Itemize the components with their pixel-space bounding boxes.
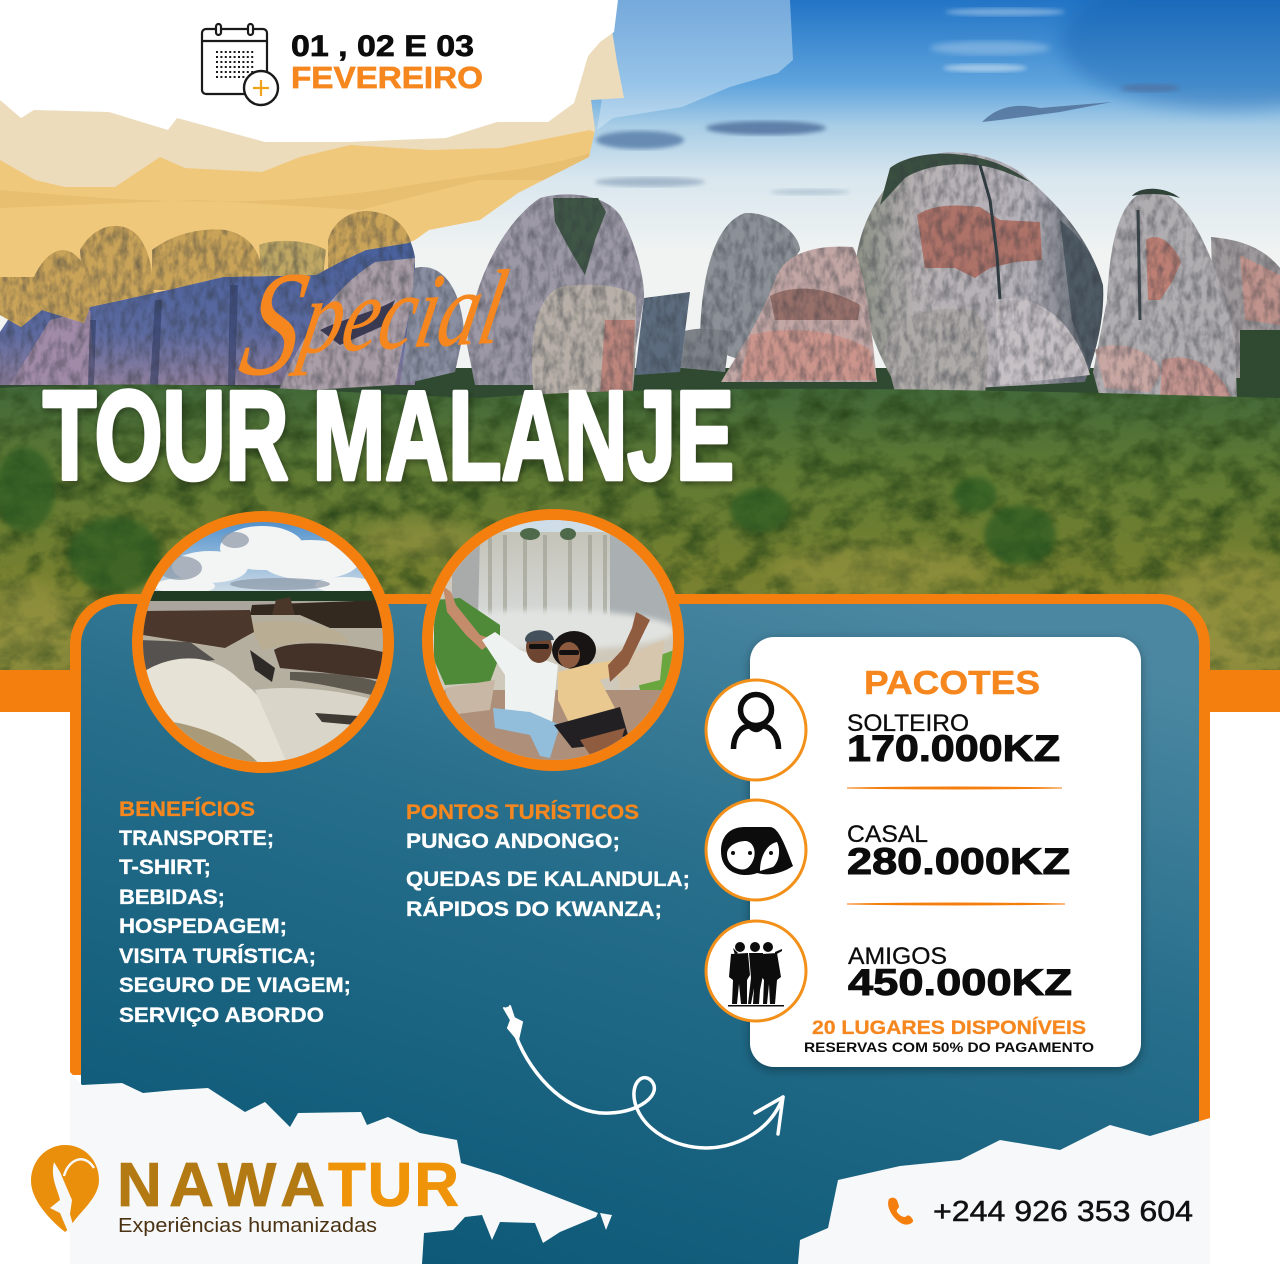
package: amigos: AMIGOS [848, 943, 947, 970]
list: benefícios: T-SHIRT; [119, 856, 211, 879]
availability note: 20 LUGARES DISPONÍVEIS [812, 1017, 1086, 1039]
sky background [0, 0, 1280, 420]
icon: calendar [202, 24, 278, 105]
savanna landscape [0, 384, 1280, 680]
package: solteiro: SOLTEIRO [847, 710, 969, 737]
package: solteiro [847, 710, 1060, 769]
title script: Special: S [230, 240, 319, 408]
contact: phone [888, 1196, 1193, 1228]
traveller one [444, 588, 487, 650]
arrow: curved loop arrow [504, 1006, 783, 1148]
title script: Special: pecial [288, 247, 516, 376]
photo: rapids [130, 510, 400, 785]
rock: far right [1211, 237, 1280, 378]
tagline: Experiências humanizadas [118, 1215, 377, 1237]
month text: FEVEREIRO [291, 60, 483, 95]
rock domes tinted by overlay [0, 211, 415, 332]
heading: pacotes: PACOTES [864, 664, 1040, 701]
panel: pacotes card [750, 637, 1141, 1067]
torn white paper: bottom left [70, 1072, 598, 1264]
rock: large dome [856, 152, 1103, 392]
list: pontos turísticos: RÁPIDOS DO KWANZA; [406, 898, 662, 921]
rock: left blue group [0, 210, 415, 385]
photo: waterfall with travellers [415, 509, 690, 771]
rock: right pillar [1093, 190, 1237, 402]
list: benefícios: TRANSPORTE; [119, 827, 274, 850]
logo: Nawatur [31, 1145, 459, 1237]
icon: phone [888, 1198, 913, 1225]
torn white paper: bottom right [798, 1118, 1210, 1264]
icon: single person [706, 680, 806, 780]
list: pontos turísticos: QUEDAS DE KALANDULA; [406, 868, 690, 891]
torn orange overlay [0, 92, 600, 335]
overlay tan corner [570, 30, 624, 105]
reservation note: RESERVAS COM 50% DO PAGAMENTO [804, 1040, 1094, 1055]
icon: logo pin [31, 1145, 99, 1232]
rock: pink middle [721, 247, 877, 382]
logo: Nawatur: TUR [328, 1151, 459, 1220]
orange band [0, 670, 1280, 712]
list: benefícios: BEBIDAS; [119, 886, 225, 909]
phone number: +244 926 353 604 [933, 1196, 1193, 1228]
rock: centre pair [467, 194, 644, 385]
package: casal: 280.000KZ [847, 841, 1070, 882]
list: benefícios: HOSPEDAGEM; [119, 915, 287, 938]
list: pontos turísticos: PUNGO ANDONGO; [406, 830, 620, 853]
traveller two [552, 631, 596, 669]
date text: 01 , 02 E 03 [291, 30, 474, 63]
panel: teal content [70, 594, 1210, 1264]
rock formations [0, 152, 1280, 402]
torn white paper top [0, 0, 618, 142]
rock: grey blue middle [700, 213, 800, 360]
torn paper droplet [600, 1213, 612, 1230]
heading: pontos turísticos: PONTOS TURÍSTICOS [406, 801, 639, 824]
icon: couple [706, 800, 806, 900]
package: casal [847, 821, 1070, 882]
package: casal: CASAL [847, 821, 928, 848]
list: benefícios: SERVIÇO ABORDO [119, 1004, 324, 1027]
list: benefícios [119, 798, 351, 1027]
heading: benefícios: BENEFÍCIOS [119, 798, 255, 821]
date block [202, 24, 483, 105]
tree line behind rocks [0, 330, 1280, 420]
list: benefícios: SEGURO DE VIAGEM; [119, 974, 351, 997]
wordmark: NAWA [117, 1151, 325, 1220]
list: benefícios: VISITA TURÍSTICA; [119, 945, 316, 968]
title: TOUR MALANJE: TOUR MALANJE [43, 365, 734, 506]
package: amigos [848, 943, 1072, 1003]
list: pontos turísticos [406, 801, 690, 921]
icon: friends [706, 921, 806, 1021]
white lower background [0, 712, 1280, 1264]
package: solteiro: 170.000KZ [847, 728, 1060, 769]
package: amigos: 450.000KZ [848, 962, 1072, 1003]
